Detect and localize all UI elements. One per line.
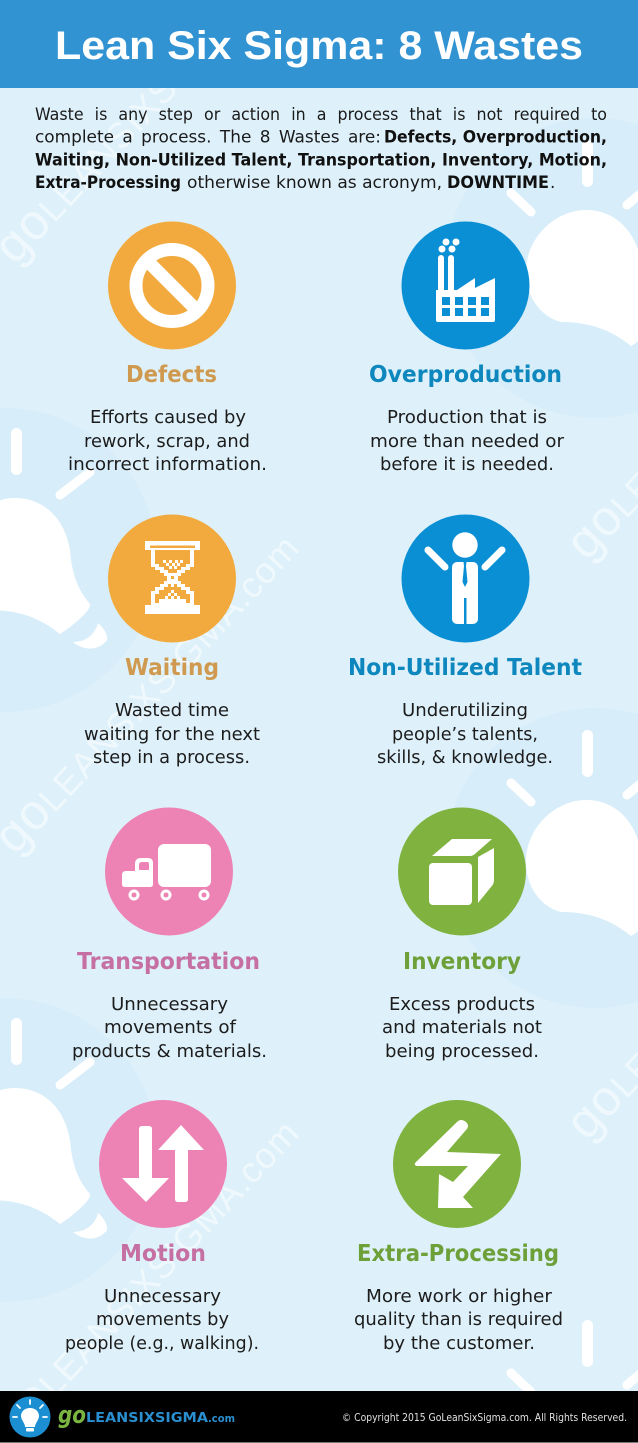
panel: inventory: Excess products — [389, 994, 535, 1015]
icon: lightning arrow — [393, 1100, 521, 1228]
icon: person with raised arms — [402, 514, 530, 642]
icon: factory — [402, 222, 530, 350]
icon: logo light bulb — [10, 1396, 50, 1438]
panel: transportation: movements of — [104, 1017, 237, 1038]
intro text block: complete a process. The 8 Wastes are: — [35, 126, 381, 146]
icon: box — [398, 808, 526, 936]
panel: waiting: step in a process. — [93, 747, 250, 768]
panel: inventory: being processed. — [385, 1041, 539, 1062]
panel: waiting: waiting for the next — [84, 724, 260, 745]
header banner with title: Lean Six Sigma: 8 Wastes — [55, 24, 583, 68]
panel: motion: people (e.g., walking). — [65, 1333, 259, 1354]
intro text block: Waiting, Non-Utilized Talent, Transportation, Inventory, Motion, — [35, 150, 607, 170]
panel: waiting — [84, 514, 260, 768]
intro text block: Waste is any step or action in a process that is not required to — [35, 104, 607, 124]
panel: extra-processing: Extra-Processing — [357, 1239, 559, 1267]
icon: truck — [105, 808, 233, 936]
panel: overproduction: before it is needed. — [380, 454, 554, 475]
panel: transportation: products & materials. — [72, 1041, 267, 1062]
panel: waiting: Waiting — [125, 653, 219, 681]
panel: motion: Unnecessary — [104, 1286, 221, 1307]
panel: non-utilized talent: Non-Utilized Talent — [348, 653, 582, 681]
panel: motion: Motion — [120, 1239, 206, 1267]
intro text block: . — [550, 172, 555, 192]
panel: waiting: Wasted time — [115, 700, 229, 721]
panel: transportation — [72, 808, 267, 1062]
logo wordmark: go — [58, 1401, 86, 1429]
icon: prohibition sign — [108, 222, 236, 350]
panel: non-utilized talent — [348, 514, 582, 768]
panel: non-utilized talent: Underutilizing — [402, 700, 528, 721]
panel: extra-processing: More work or higher — [366, 1286, 553, 1307]
panel: extra-processing: quality than is required — [354, 1309, 563, 1330]
footer bar — [0, 1391, 638, 1443]
panel: motion — [65, 1100, 259, 1354]
panel: overproduction: more than needed or — [370, 431, 565, 452]
panel: inventory: Inventory — [403, 947, 521, 975]
logo wordmark: .com — [208, 1413, 235, 1425]
panel: defects: incorrect information. — [68, 454, 267, 475]
panel: overproduction: Production that is — [387, 407, 547, 428]
panel: transportation: Unnecessary — [111, 994, 228, 1015]
icon: up and down arrows — [99, 1100, 227, 1228]
intro text block: DOWNTIME — [447, 172, 549, 192]
panel: inventory — [382, 808, 542, 1062]
panel: extra-processing: by the customer. — [383, 1333, 535, 1354]
panel: defects: rework, scrap, and — [84, 431, 250, 452]
panel: transportation: Transportation — [77, 947, 260, 975]
panel: defects: Efforts caused by — [90, 407, 246, 428]
panel: defects — [68, 222, 267, 475]
panel: inventory: and materials not — [382, 1017, 542, 1038]
header banner with title — [0, 0, 638, 88]
panel: overproduction: Overproduction — [369, 360, 562, 388]
intro text block: Extra-Processing — [35, 172, 181, 192]
intro text block: otherwise known as acronym, — [187, 172, 442, 192]
panel: extra-processing — [354, 1100, 563, 1354]
icon: hourglass — [108, 514, 236, 642]
intro text block: Defects, Overproduction, — [384, 126, 607, 146]
intro text block — [35, 104, 607, 192]
panel: overproduction — [369, 222, 565, 475]
panel: motion: movements by — [96, 1309, 229, 1330]
panel: non-utilized talent: people’s talents, — [392, 724, 538, 745]
panel: defects: Defects — [126, 360, 217, 388]
panel: non-utilized talent: skills, & knowledge. — [377, 747, 553, 768]
logo wordmark: LEANSIXSIGMA — [86, 1410, 209, 1426]
logo wordmark — [58, 1401, 235, 1429]
